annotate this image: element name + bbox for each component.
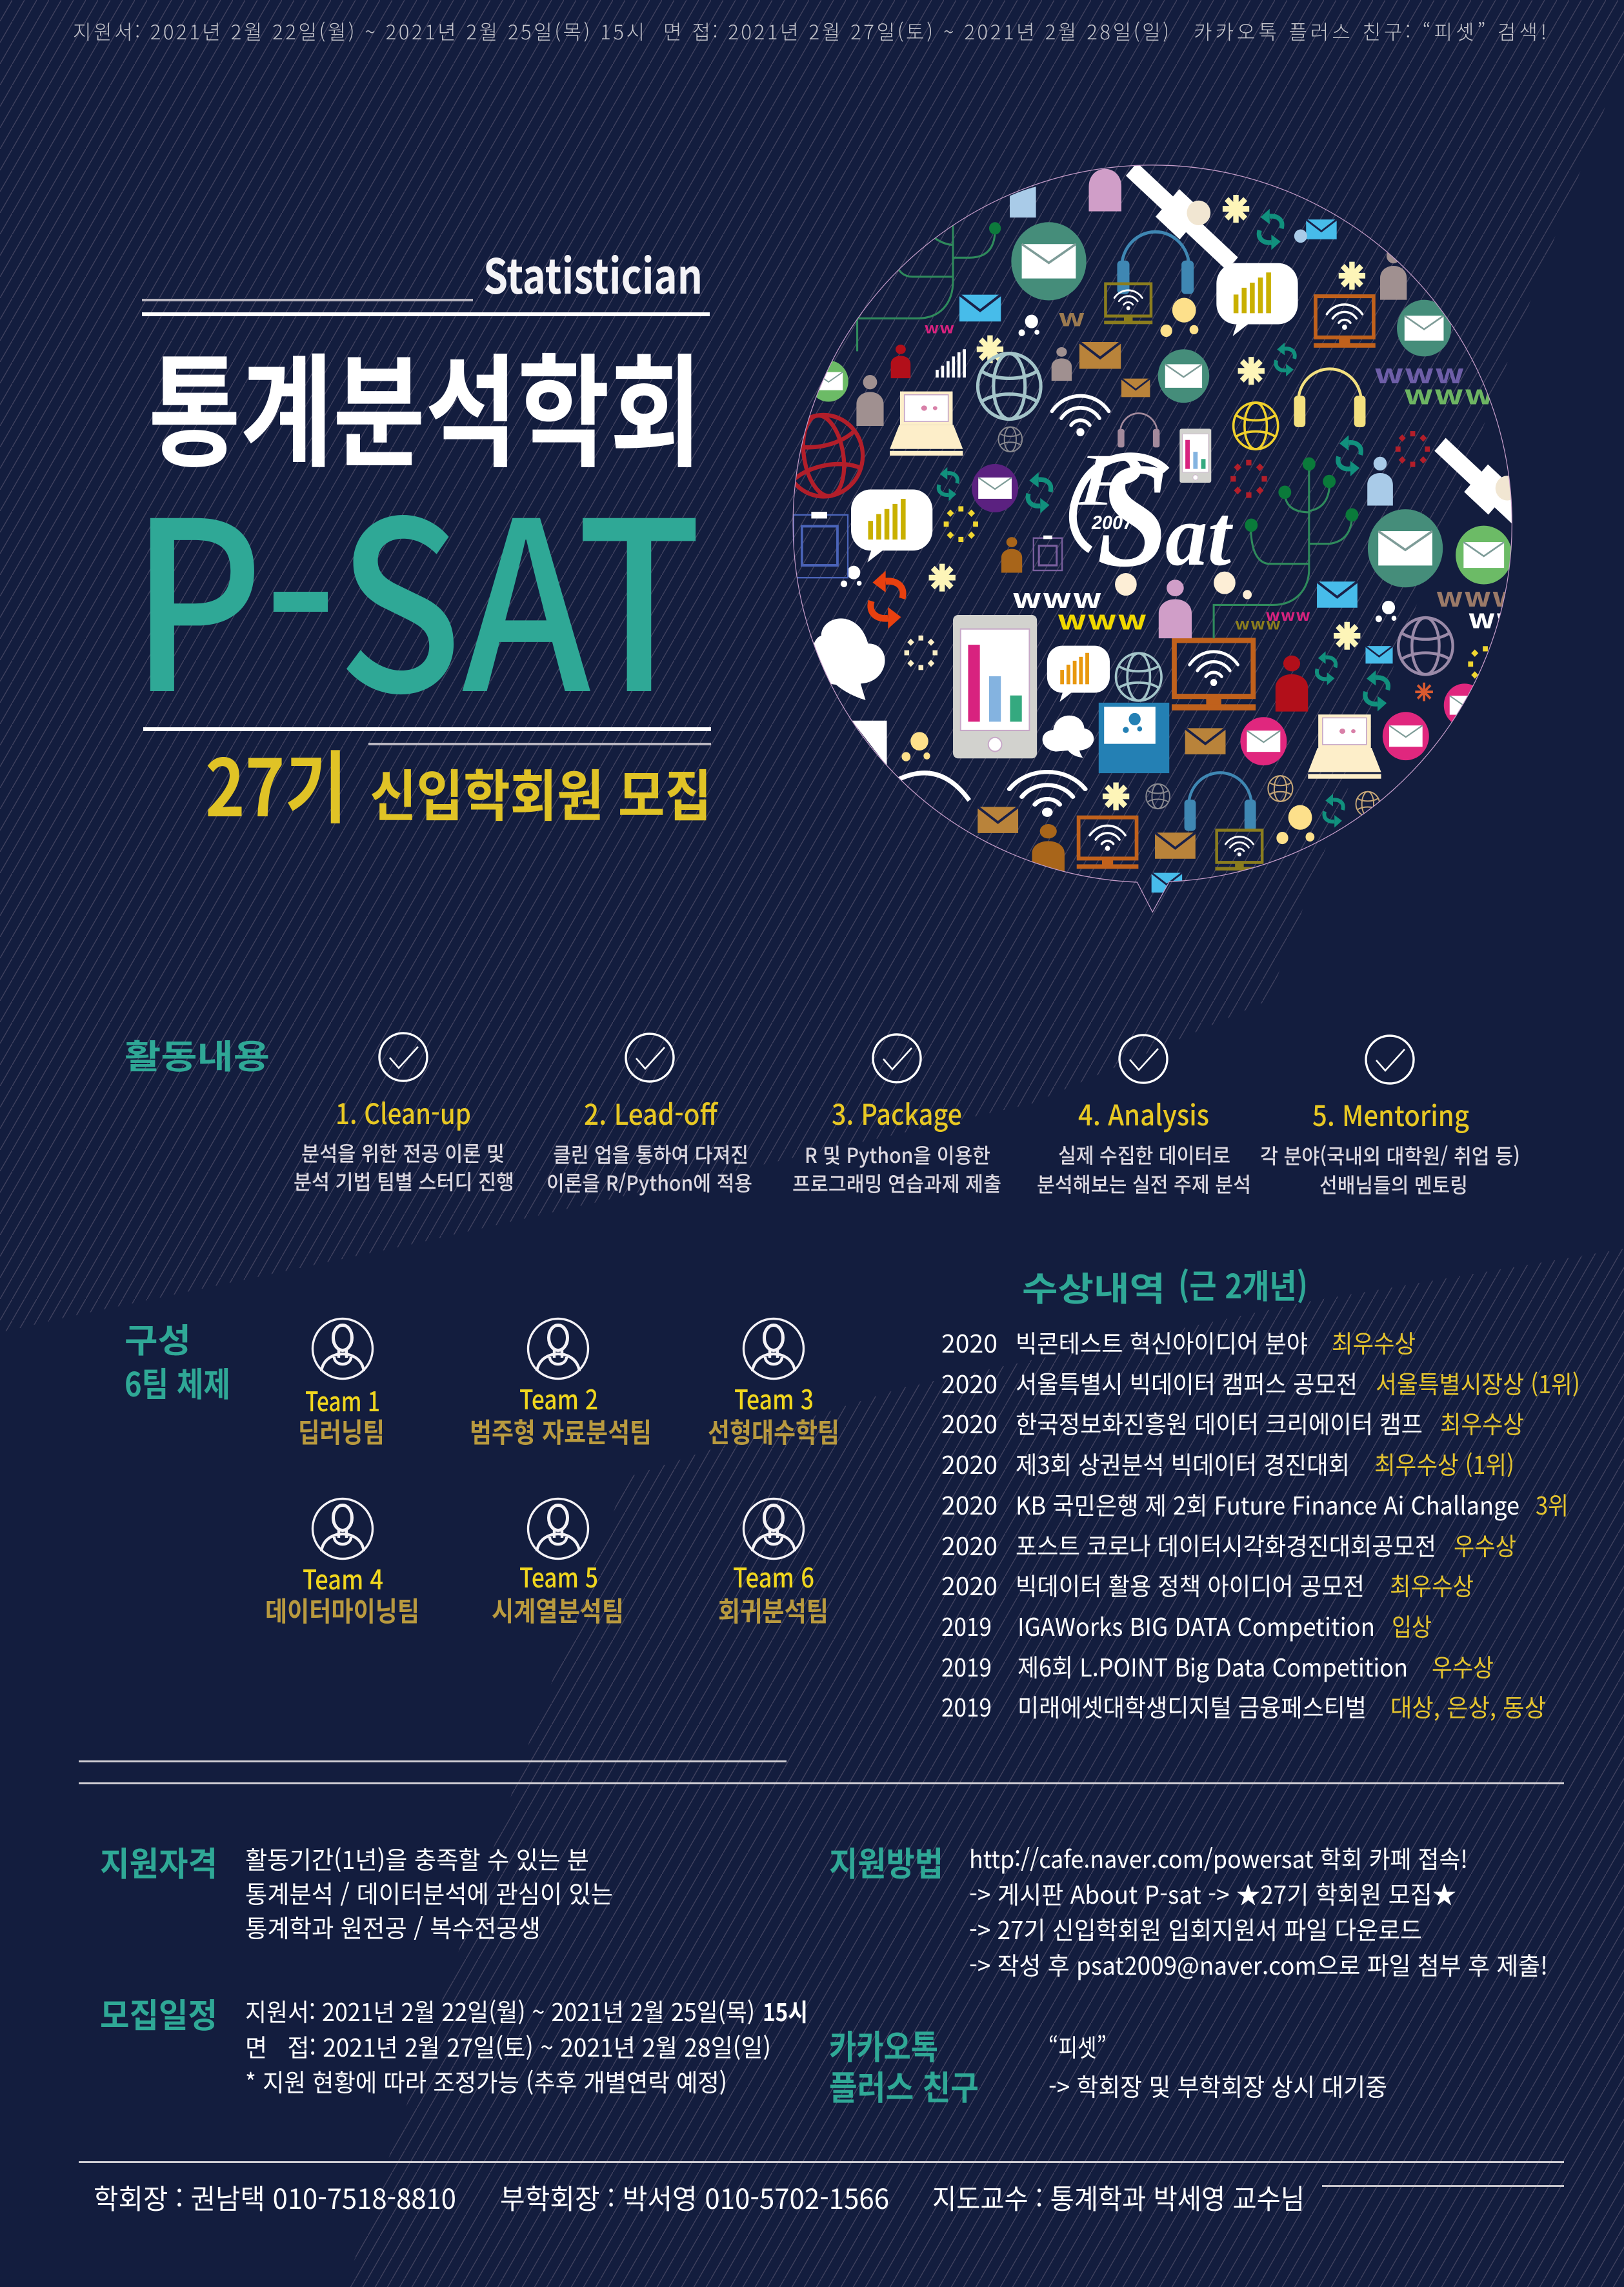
icons: www text marks: ww (925, 317, 955, 338)
icons: www text marks: www (1374, 352, 1465, 391)
footer contacts: 부학회장 : 박서영 010-5702-1566 (500, 2177, 889, 2217)
icons: recycle arrows (870, 209, 1388, 828)
activity 3: R 및 Python을 이용한 (805, 1140, 990, 1169)
panel: kakaotalk: -> 학회장 및 부학회장 상시 대기중 (1048, 2068, 1387, 2103)
activity 1: 분석을 위한 전공 이론 및 (301, 1138, 505, 1167)
award list: 우수상 (1432, 1648, 1494, 1684)
top info strip (73, 16, 1547, 45)
icons: www text marks: www (1235, 612, 1281, 634)
icons: laptops (890, 392, 1381, 779)
award list: 서울특별시장상 (1위) (1376, 1365, 1580, 1400)
icons: www text marks (925, 313, 1505, 630)
activity 4: 4. Analysis (1078, 1093, 1209, 1134)
icon: network tree top (857, 217, 1001, 351)
award list (941, 1324, 1580, 1724)
team 4: 데이터마이닝팀 (265, 1590, 419, 1629)
heading: 카카오톡 플러스 친구 (829, 2020, 979, 2110)
top info strip: 지원서: 2021년 2월 22일(월) ~ 2021년 2월 25일(목) 15시 (73, 16, 645, 45)
subtitle: Statistician: Statistician (483, 239, 703, 308)
team 5 (492, 1498, 624, 1629)
team 1: 딥러닝팀 (298, 1411, 385, 1451)
heading: 수상내역 (1022, 1260, 1308, 1311)
heading: 지원방법: 지원방법 (829, 1837, 943, 1886)
icons: people (856, 249, 1407, 875)
P-Sat logo: at (1165, 488, 1233, 584)
panel: awards (941, 1260, 1580, 1724)
award list: IGAWorks BIG DATA Competition (1018, 1607, 1375, 1643)
footer contacts: 지도교수 : 통계학과 박세영 교수님 (932, 2177, 1305, 2217)
icons: www text marks: www (1265, 603, 1311, 625)
panel: schedule: * 지원 현황에 따라 조정가능 (추후 개별연락 예정) (245, 2063, 727, 2099)
team 4 (265, 1498, 419, 1629)
activity 3 (792, 1034, 1001, 1198)
award list: 최우수상 (1390, 1567, 1474, 1602)
P-Sat logo: P (1076, 439, 1144, 521)
activity 3: 3. Package (832, 1092, 962, 1133)
panel: kakaotalk (829, 2020, 1387, 2110)
heading: 모집일정: 모집일정 (100, 1989, 217, 2037)
team 4: Team 4 (303, 1558, 383, 1598)
heading: 수상내역: (근 2개년) (1178, 1260, 1308, 1308)
icons: www text marks: w (1058, 299, 1086, 334)
team 6 (718, 1498, 828, 1629)
team 2: Team 2 (519, 1378, 598, 1418)
heading: 카카오톡 플러스 친구: 카카오톡 (829, 2020, 938, 2069)
top info strip: 카카오톡 플러스 친구: “피셋” 검색! (1194, 16, 1547, 45)
icons: frames (794, 512, 1062, 578)
award list: 2019 (941, 1648, 992, 1684)
activity 4 (1037, 1035, 1251, 1198)
icons: asterisks (929, 195, 1365, 810)
award list: 최우수상 (1332, 1324, 1416, 1360)
heading: 수상내역: 수상내역 (1022, 1262, 1165, 1311)
panel: how to apply: -> 게시판 About P-sat -> ★27기 학회원 모집★ (969, 1875, 1456, 1911)
activity 3: 프로그래밍 연습과제 제출 (792, 1168, 1001, 1198)
activity 4: 실제 수집한 데이터로 (1058, 1140, 1230, 1169)
icon: white arc (897, 773, 969, 800)
award list: 2020 (941, 1324, 997, 1360)
team 3: 선형대수학팀 (708, 1411, 839, 1451)
heading: 통계분석학회: 통계분석학회 (148, 314, 702, 492)
icons: www text marks: www (1436, 576, 1520, 614)
icon: satellite top (1126, 165, 1238, 268)
footer contacts (94, 2177, 1305, 2217)
icons: www text marks: www (1468, 597, 1552, 636)
heading: 신입학회원 모집: 신입학회원 모집 (370, 751, 712, 832)
team 2 (470, 1319, 652, 1451)
title block (130, 239, 712, 840)
icon: cloud small (1043, 716, 1094, 758)
team 1: Team 1 (305, 1380, 380, 1420)
icon: satellite right (1428, 425, 1545, 541)
icons: globes (778, 354, 1453, 816)
icons: row 1 mail (809, 219, 1451, 403)
activity 5: 각 분야(국내외 대학원/ 취업 등) (1260, 1140, 1520, 1170)
award list: 2019 (941, 1688, 992, 1724)
icons: headphones (1118, 232, 1365, 831)
team 5: Team 5 (519, 1557, 598, 1596)
panel: schedule (100, 1989, 808, 2099)
team 3 (708, 1319, 839, 1451)
panel: activities (125, 1030, 1520, 1199)
icons: dot clusters (841, 297, 1396, 844)
panel: how to apply: http://cafe.naver.com/powersat 학회 카페 접속! (969, 1840, 1468, 1875)
activity 2: 2. Lead-off (584, 1092, 719, 1133)
speech bubble icon collage (778, 149, 1552, 912)
icon: network tree mid (1214, 458, 1358, 638)
panel: eligibility (100, 1837, 613, 1944)
award list: 대상, 은상, 동상 (1390, 1688, 1546, 1724)
icon: small tablet (1179, 428, 1211, 483)
icon: cloud large (812, 618, 885, 700)
award list: 포스트 코로나 데이터시각화경진대회공모전 (1016, 1527, 1436, 1562)
icons: www text marks: www (1012, 577, 1103, 616)
award list: 3위 (1536, 1486, 1569, 1522)
activity 5: 5. Mentoring (1312, 1093, 1469, 1134)
heading: 구성: 구성 (125, 1314, 191, 1362)
award list: 최우수상 (1440, 1405, 1524, 1440)
heading: 27기: 27기 (205, 725, 347, 840)
icons: monitors (1077, 284, 1376, 871)
panel: how to apply: -> 27기 신입학회원 입회지원서 파일 다운로드 (969, 1911, 1422, 1946)
panel: schedule: 면 접: 2021년 2월 27일(토) ~ 2021년 2월 28일(일) (245, 2028, 771, 2064)
team 2: 범주형 자료분석팀 (470, 1411, 652, 1451)
award list: 2020 (941, 1486, 997, 1522)
team 1 (298, 1319, 385, 1451)
icon: small red asterisk (1415, 683, 1433, 701)
icons: bottom mail (852, 683, 1485, 892)
award list: 우수상 (1454, 1527, 1516, 1562)
bubble outline (793, 165, 1512, 912)
award list: 2020 (941, 1567, 997, 1602)
P-Sat logo: 2007 (1091, 512, 1134, 534)
icons: www text marks: www (1058, 599, 1148, 638)
activity 5 (1260, 1036, 1520, 1199)
heading: 활동내용: 활동내용 (125, 1030, 270, 1078)
award list: 빅데이터 활용 정책 아이디어 공모전 (1016, 1567, 1365, 1602)
heading: P-SAT: P-SAT (130, 419, 702, 759)
award list: 제3회 상권분석 빅데이터 경진대회 (1016, 1446, 1350, 1481)
icons: www text marks: www (1404, 374, 1495, 412)
award list: 2020 (941, 1365, 997, 1400)
panel: eligibility: 활동기간(1년)을 충족할 수 있는 분 (245, 1840, 589, 1876)
icon: purple mail (972, 464, 1018, 512)
heading: 카카오톡 플러스 친구: 플러스 친구 (829, 2061, 979, 2110)
panel: how to apply (829, 1837, 1548, 1982)
icons: dotted rings (905, 431, 1503, 682)
panel: eligibility: 통계분석 / 데이터분석에 관심이 있는 (245, 1875, 613, 1910)
activity 5: 선배님들의 멘토링 (1319, 1169, 1468, 1199)
icon: domes (1010, 169, 1121, 217)
icon: signal bars (936, 349, 966, 378)
panel: teams (125, 1314, 839, 1629)
activity 2 (546, 1034, 752, 1197)
award list: 제6회 L.POINT Big Data Competition (1018, 1648, 1408, 1684)
activity 2: 클린 업을 통하여 다져진 (553, 1139, 748, 1169)
award list: 빅콘테스트 혁신아이디어 분야 (1016, 1324, 1308, 1360)
award list: 최우수상 (1위) (1374, 1446, 1514, 1481)
award list: 한국정보화진흥원 데이터 크리에이터 캠프 (1016, 1405, 1423, 1440)
heading: 지원자격: 지원자격 (100, 1837, 217, 1886)
icon: large tablet (953, 615, 1037, 758)
team 5: 시계열분석팀 (492, 1590, 624, 1629)
activity 4: 분석해보는 실전 주제 분석 (1037, 1169, 1251, 1198)
award list: 입상 (1392, 1607, 1432, 1643)
panel: schedule: 지원서: 2021년 2월 22일(월) ~ 2021년 2월 25일(목) (245, 1993, 755, 2028)
activity 1: 1. Clean-up (336, 1091, 471, 1133)
P-Sat logo: S (1097, 432, 1169, 598)
panel: kakaotalk: “피셋” (1048, 2028, 1107, 2064)
activity 1: 분석 기법 팀별 스터디 진행 (294, 1166, 514, 1196)
team 3: Team 3 (734, 1378, 814, 1418)
top info strip: 면 접: 2021년 2월 27일(토) ~ 2021년 2월 28일(일) (663, 16, 1169, 45)
icon: blue chart card (1099, 703, 1169, 773)
activity 2: 이론을 R/Python에 적용 (546, 1167, 752, 1197)
team 6: 회귀분석팀 (718, 1590, 828, 1629)
icon: wifi (1009, 396, 1109, 817)
award list: 2020 (941, 1405, 997, 1440)
award list: KB 국민은행 제 2회 Future Finance Ai Challange (1016, 1486, 1519, 1522)
activity 1 (294, 1033, 514, 1196)
panel: how to apply: -> 작성 후 psat2009@naver.com으로 파일 첨부 후 제출! (969, 1946, 1548, 1982)
subheading: 6팀 체제: 6팀 체제 (125, 1358, 230, 1406)
award list: 2020 (941, 1527, 997, 1562)
award list: 2019 (941, 1607, 992, 1643)
panel: eligibility: 통계학과 원전공 / 복수전공생 (245, 1909, 541, 1944)
icons: green mail right (1317, 509, 1512, 663)
team 6: Team 6 (733, 1557, 814, 1596)
footer contacts: 학회장 : 권남택 010-7518-8810 (94, 2177, 456, 2217)
award list: 서울특별시 빅데이터 캠퍼스 공모전 (1016, 1365, 1358, 1400)
P-Sat logo (1073, 432, 1233, 598)
panel: schedule: 15시 (763, 1993, 808, 2028)
icons: chat bubbles (851, 263, 1298, 702)
award list: 2020 (941, 1446, 997, 1481)
award list: 미래에셋대학생디지털 금융페스티벌 (1018, 1688, 1367, 1724)
